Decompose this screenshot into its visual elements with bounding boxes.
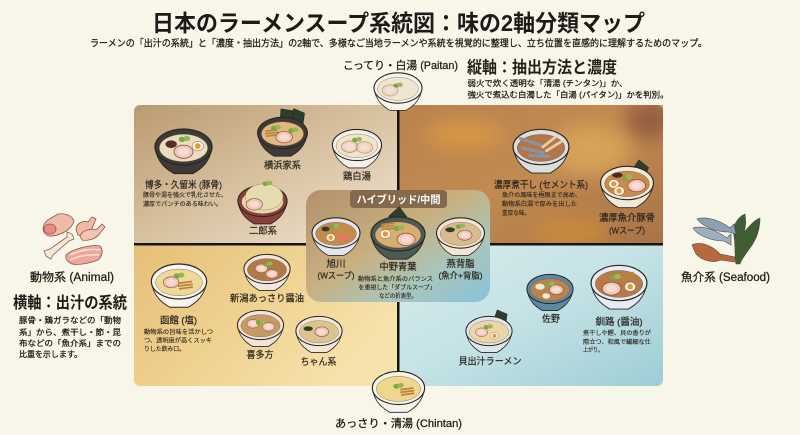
bowl: kitakata bbox=[237, 310, 284, 347]
label: hakata: 豚骨や湯を強火で乳化させた、 bbox=[143, 191, 227, 199]
label: hakodate: 函館 (塩) bbox=[160, 314, 197, 326]
text: horizontal axis description bbox=[19, 315, 121, 359]
panel: quadrant map bbox=[134, 100, 675, 386]
label: kushiro: 際立つ、和風で繊細な仕 bbox=[583, 338, 651, 346]
bowl: tsubame bbox=[436, 218, 484, 255]
label: hakata: 濃厚でパンチのある味わい。 bbox=[143, 200, 222, 208]
label: asahikawa bbox=[318, 258, 355, 280]
bowl: kushiro bbox=[591, 265, 647, 309]
text: horizontal axis description: 豚骨・鶏ガラなどの「動物 bbox=[19, 315, 121, 325]
bowl: noukou gyokai bbox=[601, 159, 653, 208]
label: animal: 動物系 (Animal) bbox=[30, 270, 114, 284]
text: horizontal axis description: 比重を示します。 bbox=[19, 349, 82, 359]
label: niboshi: 濃厚煮干し (セメント系) bbox=[494, 179, 588, 191]
label: hakodate bbox=[144, 314, 213, 353]
axis label: paitan: こってり・白湯 (Paitan) bbox=[343, 58, 458, 72]
hybrid label: ハイブリッド/中間 bbox=[356, 193, 440, 206]
bowl: sano bbox=[527, 274, 573, 311]
label: niigata: 新潟あっさり醤油 bbox=[230, 292, 304, 304]
label: asahikawa: 旭川 bbox=[326, 258, 346, 270]
bowl: jiro bbox=[238, 181, 287, 224]
label: nakano aoba: を重視した「ダブルスープ」 bbox=[358, 284, 436, 292]
label: hakodate: りした飲み口。 bbox=[144, 345, 185, 353]
label: hakata bbox=[143, 179, 227, 208]
bowl: toripaitan bbox=[332, 129, 382, 168]
label: niboshi bbox=[494, 179, 588, 217]
vertical axis bbox=[397, 100, 400, 380]
label: noukou gyokai: 濃厚魚介豚骨 bbox=[599, 212, 655, 224]
label: tsubame bbox=[438, 258, 483, 280]
label: kushiro: 釧路 (醤油) bbox=[596, 316, 642, 328]
bowl: kai dashi bbox=[466, 310, 512, 353]
label: kitakata: 喜多方 bbox=[246, 349, 274, 361]
bowl: asahikawa bbox=[312, 218, 360, 255]
bowl: chintan bottom bbox=[372, 371, 425, 412]
hybrid label bbox=[350, 190, 447, 208]
label: nakano aoba: などの折衷型。 bbox=[379, 292, 417, 300]
subtitle: ラーメンの「出汁の系統」と「濃度・抽出方法」の2軸で、多様なご当地ラーメンや系統を視覚的に整理し、立ち位置を直感的に理解するためのマップ。 bbox=[90, 38, 707, 50]
label: nakano aoba bbox=[358, 261, 436, 300]
label: chan: ちゃん系 bbox=[300, 357, 337, 368]
icon: animal ingredients bbox=[43, 214, 105, 264]
label: hakodate: 動物系の旨味を活かしつ bbox=[144, 328, 213, 336]
label: jiro: 二郎系 bbox=[249, 226, 277, 237]
label: asahikawa: (Wスープ) bbox=[318, 270, 355, 280]
label: niboshi: 動物系白湯で厚みを出した bbox=[502, 200, 577, 208]
bowl: hakodate bbox=[151, 264, 207, 307]
icon: seafood ingredients bbox=[692, 214, 760, 264]
label: kai dashi: 貝出汁ラーメン bbox=[458, 356, 522, 368]
bowl: niigata bbox=[244, 254, 290, 291]
label: yokohama: 横浜家系 bbox=[264, 160, 301, 172]
text: vertical axis description: 強火で煮込む白濁した「白湯 (パイタン)」かを判別。 bbox=[468, 90, 668, 100]
title: 日本のラーメンスープ系統図：味の2軸分類マップ bbox=[152, 10, 645, 36]
label: noukou gyokai: (Wスープ) bbox=[609, 226, 645, 236]
quadrant: animal rich bbox=[134, 105, 398, 244]
bowl: niboshi bbox=[513, 129, 569, 173]
label: kushiro: 煮干しや鰹、貝の香りが bbox=[583, 329, 651, 337]
quadrant: seafood rich bbox=[399, 100, 675, 246]
label: kushiro: 上がり。 bbox=[583, 346, 603, 354]
heading: horizontal axis: 横軸：出汁の系統 bbox=[13, 293, 127, 312]
label: tsubame: 燕背脂 bbox=[446, 258, 475, 270]
text: vertical axis description bbox=[468, 78, 668, 100]
label: kushiro bbox=[583, 316, 651, 354]
bowl: paitan top bbox=[374, 73, 422, 110]
bowl: nakano aoba bbox=[371, 206, 425, 259]
bowl: hakata bbox=[155, 129, 212, 174]
label: tsubame: (魚介+背脂) bbox=[438, 270, 483, 280]
label: toripaitan: 鶏白湯 bbox=[343, 170, 371, 182]
label: niboshi: 重厚な味。 bbox=[502, 209, 530, 217]
label: sano: 佐野 bbox=[542, 313, 560, 325]
bowl: yokohama bbox=[258, 108, 307, 156]
label: hakata: 博多・久留米 (豚骨) bbox=[145, 179, 222, 191]
label: seafood: 魚介系 (Seafood) bbox=[681, 271, 770, 284]
axis label: chintan: あっさり・清湯 (Chintan) bbox=[335, 416, 462, 430]
label: hakodate: つ、透明度が高くスッキ bbox=[144, 336, 212, 344]
label: nakano aoba: 中野青葉 bbox=[380, 261, 417, 273]
text: horizontal axis description: 系」から、煮干し・節・昆 bbox=[19, 327, 121, 337]
text: horizontal axis description: 布などの「魚介系」までの bbox=[19, 338, 121, 348]
label: niboshi: 魚介の風味を極限まで高め、 bbox=[502, 191, 581, 199]
text: vertical axis description: 弱火で炊く透明な「清湯 (チンタン)」か、 bbox=[468, 78, 628, 88]
label: nakano aoba: 動物系と魚介系のバランス bbox=[358, 275, 433, 283]
horizontal axis bbox=[134, 243, 663, 246]
quadrant: animal light bbox=[134, 245, 398, 386]
label: noukou gyokai bbox=[599, 212, 655, 236]
bowl: chan bbox=[296, 316, 342, 353]
heading: vertical axis: 縦軸：抽出方法と濃度 bbox=[467, 57, 617, 77]
panel: hybrid center bbox=[306, 190, 490, 302]
quadrant: seafood light bbox=[399, 245, 663, 386]
